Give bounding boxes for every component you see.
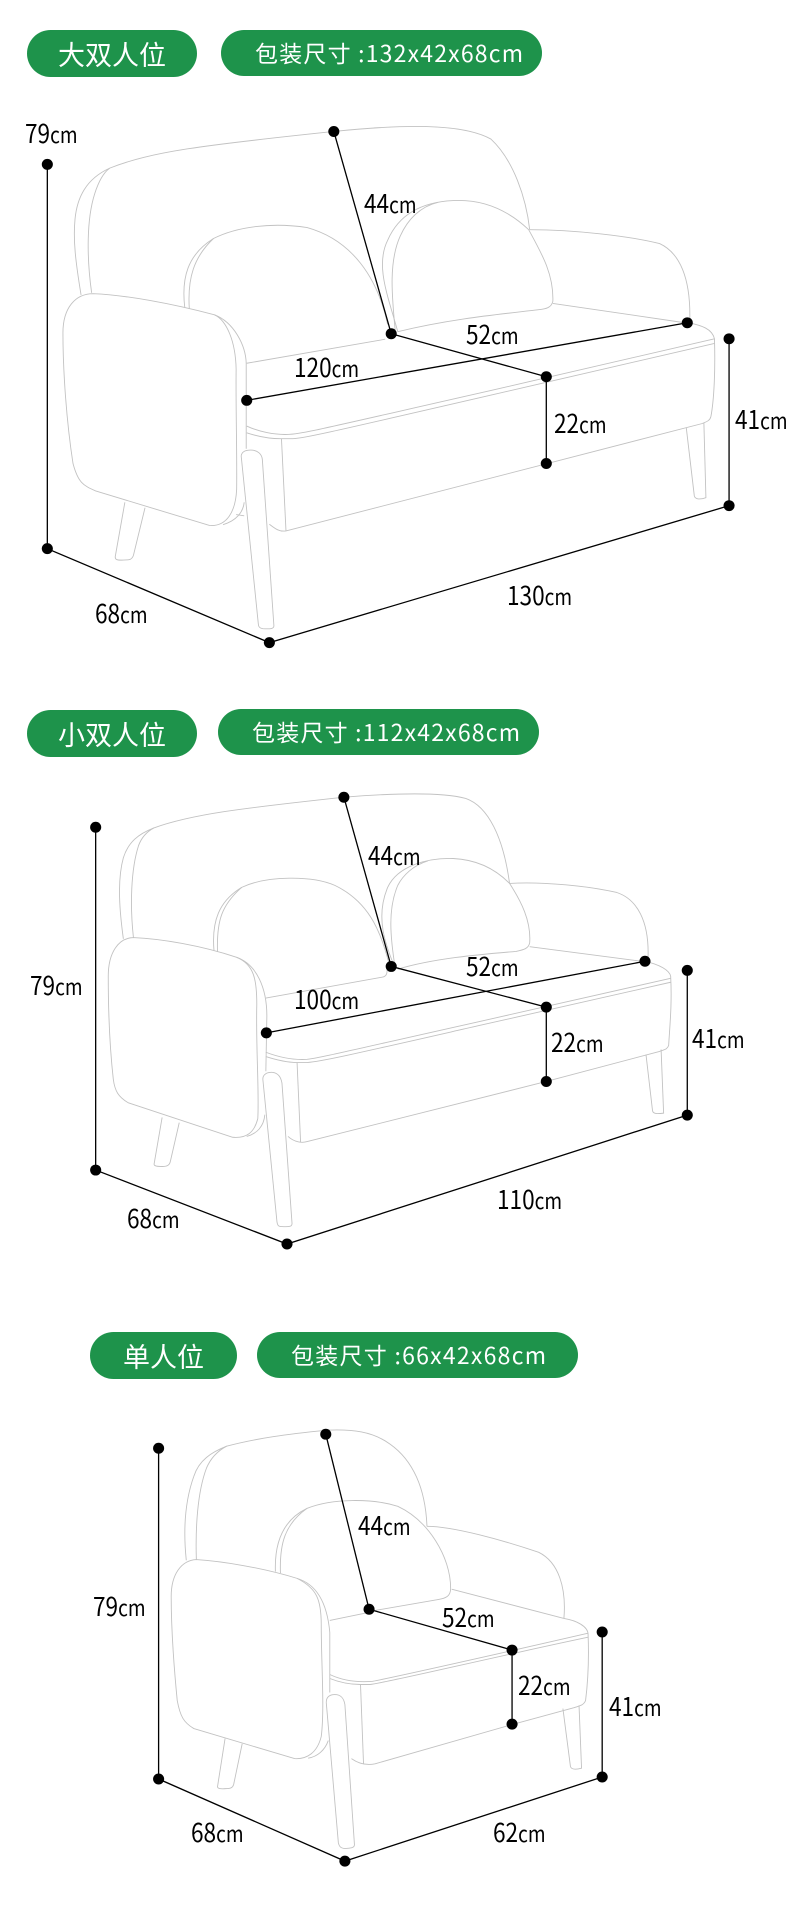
label pill: 小双人位 [27, 710, 197, 757]
dimension labels: small loveseat: 79cm [30, 966, 83, 1004]
dimension labels: single armchair: 41cm [609, 1687, 662, 1725]
dimension labels: large loveseat: 130cm [507, 576, 572, 614]
measurement lines and dots: small loveseat [90, 792, 693, 1250]
label pill: package size 112x42x68cm [218, 709, 539, 755]
label pill: package size 132x42x68cm [221, 30, 542, 76]
dimension labels: large loveseat: 52cm [466, 315, 519, 353]
label pill: 单人位 [90, 1332, 237, 1379]
dimension labels: single armchair [93, 1506, 662, 1851]
dimension labels: single armchair: 68cm [191, 1813, 244, 1851]
label pill: 大双人位: 大双人位 [58, 41, 166, 71]
label pill: 小双人位: 小双人位 [58, 721, 166, 751]
label pill: 大双人位 [27, 30, 197, 77]
dimension labels: single armchair: 79cm [93, 1587, 146, 1625]
dimension labels: small loveseat [30, 836, 745, 1237]
dimension labels: single armchair: 22cm [518, 1666, 571, 1704]
measurement lines and dots: large loveseat [42, 126, 735, 648]
label pill: 单人位: 单人位 [123, 1343, 204, 1373]
dimension labels: large loveseat: 22cm [554, 404, 607, 442]
sofa line drawing: small loveseat [108, 794, 671, 1227]
dimension labels: single armchair: 62cm [493, 1813, 546, 1851]
panel: large loveseat [25, 30, 788, 648]
dimension labels: large loveseat: 44cm [364, 184, 417, 222]
dimension labels: small loveseat: 22cm [551, 1023, 604, 1061]
panel: single armchair [90, 1332, 662, 1867]
dimension labels: large loveseat: 41cm [735, 400, 788, 438]
dimension labels: single armchair: 44cm [358, 1506, 411, 1544]
dimension labels: small loveseat: 52cm [466, 947, 519, 985]
label pill: package size 66x42x68cm: 包装尺寸 :66x42x68cm [291, 1337, 546, 1371]
panel: small loveseat [27, 709, 745, 1250]
dimension labels: large loveseat [25, 114, 788, 632]
dimension labels: large loveseat: 120cm [294, 348, 359, 386]
dimension labels: small loveseat: 100cm [294, 980, 359, 1018]
measurement lines and dots: single armchair [153, 1429, 608, 1867]
label pill: package size 132x42x68cm: 包装尺寸 :132x42x68cm [255, 35, 523, 69]
dimension labels: single armchair: 52cm [442, 1598, 495, 1636]
dimension labels: small loveseat: 44cm [368, 836, 421, 874]
dimension labels: large loveseat: 68cm [95, 594, 148, 632]
dimension labels: small loveseat: 110cm [497, 1180, 562, 1218]
dimension labels: small loveseat: 68cm [127, 1199, 180, 1237]
sofa line drawing: single armchair [171, 1430, 588, 1848]
sofa line drawing: large loveseat [63, 126, 715, 629]
label pill: package size 66x42x68cm [257, 1332, 578, 1378]
dimension labels: small loveseat: 41cm [692, 1019, 745, 1057]
label pill: package size 112x42x68cm: 包装尺寸 :112x42x68cm [252, 714, 520, 748]
dimension labels: large loveseat: 79cm [25, 114, 78, 152]
